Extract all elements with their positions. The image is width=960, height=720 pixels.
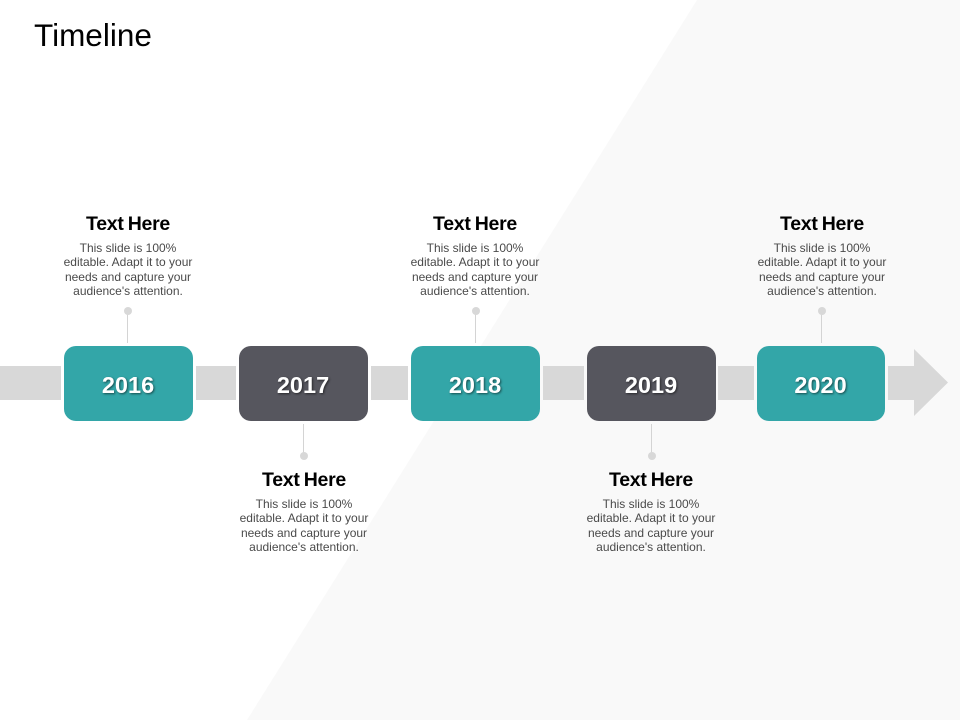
year box 2019: 2019 (625, 372, 677, 398)
year box 2018: 2018 (449, 372, 501, 398)
text block 2018: needs and capture your (412, 270, 538, 284)
connector dot 2016 (124, 307, 132, 315)
text block 2017: Text Here (262, 469, 346, 491)
text block 2019: This slide is 100% (603, 497, 699, 511)
text block 2016: Text Here (86, 213, 170, 235)
text block 2017: needs and capture your (241, 526, 367, 540)
text block 2019: Text Here (609, 469, 693, 491)
text block 2018 (411, 213, 540, 298)
arrow band segment 4 (543, 366, 584, 400)
year box 2018 (411, 346, 540, 421)
text block 2019: audience's attention. (596, 540, 706, 554)
arrow band segment 5 (718, 366, 754, 400)
year box 2016: 2016 (102, 372, 154, 398)
connector dot 2020 (818, 307, 826, 315)
text block 2018: audience's attention. (420, 284, 530, 298)
connector 2019 (651, 424, 652, 456)
text block 2016 (64, 213, 192, 298)
arrow band segment 1 (0, 366, 61, 400)
text block 2019: editable. Adapt it to your (587, 511, 715, 525)
text block 2019 (587, 469, 716, 554)
text block 2020 (758, 213, 886, 298)
text block 2018: This slide is 100% (427, 241, 523, 255)
year box 2019 (587, 346, 716, 421)
arrow band segment 3 (371, 366, 408, 400)
year box 2016 (64, 346, 193, 421)
connector 2018 (475, 311, 476, 343)
connector dot 2017 (300, 452, 308, 460)
arrow head (888, 349, 948, 416)
text block 2019: needs and capture your (588, 526, 714, 540)
text block 2020: audience's attention. (767, 284, 877, 298)
text block 2018: editable. Adapt it to your (411, 255, 539, 269)
connector 2020 (821, 311, 822, 343)
year box 2020 (757, 346, 885, 421)
year box 2017 (239, 346, 368, 421)
text block 2018: Text Here (433, 213, 517, 235)
connector dot 2019 (648, 452, 656, 460)
text block 2017: audience's attention. (249, 540, 359, 554)
text block 2020: needs and capture your (759, 270, 885, 284)
text block 2016: This slide is 100% (80, 241, 176, 255)
text block 2020: This slide is 100% (774, 241, 870, 255)
connector dot 2018 (472, 307, 480, 315)
text block 2017: editable. Adapt it to your (240, 511, 368, 525)
text block 2020: Text Here (780, 213, 864, 235)
text block 2017: This slide is 100% (256, 497, 352, 511)
text block 2016: editable. Adapt it to your (64, 255, 192, 269)
text block 2016: audience's attention. (73, 284, 183, 298)
year box 2020: 2020 (794, 372, 847, 398)
text block 2017 (240, 469, 368, 554)
connector 2017 (303, 424, 304, 456)
text block 2020: editable. Adapt it to your (758, 255, 886, 269)
year box 2017: 2017 (277, 372, 329, 398)
arrow band segment 2 (196, 366, 236, 400)
connector 2016 (127, 311, 128, 343)
text block 2016: needs and capture your (65, 270, 191, 284)
title: Timeline (34, 17, 152, 53)
